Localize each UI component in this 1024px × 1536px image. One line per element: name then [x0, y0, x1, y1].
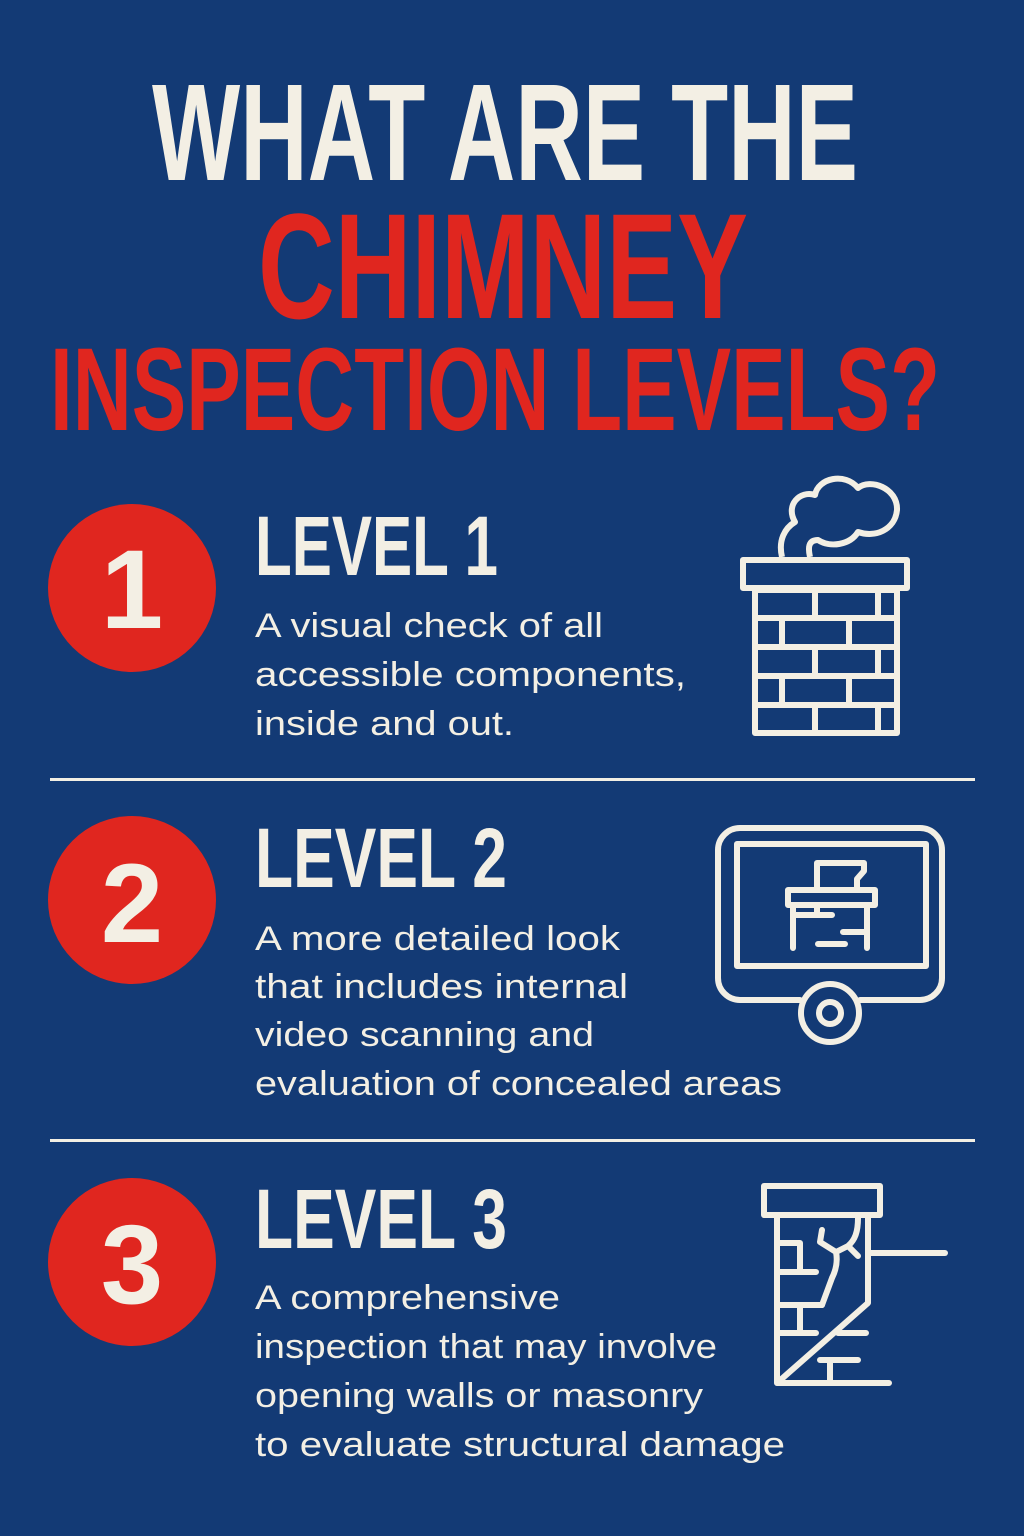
panel: level 3 — [48, 1172, 945, 1464]
text: level 1 description: A visual check of all — [255, 607, 603, 645]
icon: cracked chimney — [764, 1186, 945, 1383]
text: level 1 description — [255, 607, 686, 743]
text: level 2 description: video scanning and — [255, 1016, 594, 1054]
number badge 2: 2 — [101, 841, 163, 966]
heading: level 1: LEVEL 1 — [255, 499, 498, 593]
heading: level 2: LEVEL 2 — [255, 811, 507, 905]
text: level 2 description: evaluation of concealed areas — [255, 1065, 782, 1103]
text: level 3 description: inspection that may involve — [255, 1328, 717, 1366]
text: level 3 description: opening walls or masonry — [255, 1377, 703, 1415]
number badge 3: 3 — [101, 1202, 163, 1327]
divider — [50, 1139, 975, 1142]
panel: level 1 — [48, 479, 907, 743]
panel: level 2 — [48, 811, 942, 1103]
number badge 3 — [48, 1178, 216, 1346]
text: level 2 description: that includes internal — [255, 968, 628, 1006]
title: CHIMNEY — [258, 182, 748, 350]
text: level 1 description: accessible components, — [255, 656, 686, 694]
title — [50, 56, 940, 456]
text: level 1 description: inside and out. — [255, 705, 514, 743]
text: level 3 description: A comprehensive — [255, 1279, 560, 1317]
text: level 3 description: to evaluate structural damage — [255, 1426, 785, 1464]
divider — [50, 778, 975, 781]
text: level 3 description — [255, 1279, 785, 1464]
text: level 2 description — [255, 920, 782, 1103]
text: level 2 description: A more detailed look — [255, 920, 621, 958]
number badge 1: 1 — [101, 527, 163, 652]
number badge 2 — [48, 816, 216, 984]
icon: chimney with smoke — [743, 479, 907, 733]
heading: level 3: LEVEL 3 — [255, 1172, 507, 1266]
number badge 1 — [48, 504, 216, 672]
icon: video monitor — [718, 828, 942, 1042]
